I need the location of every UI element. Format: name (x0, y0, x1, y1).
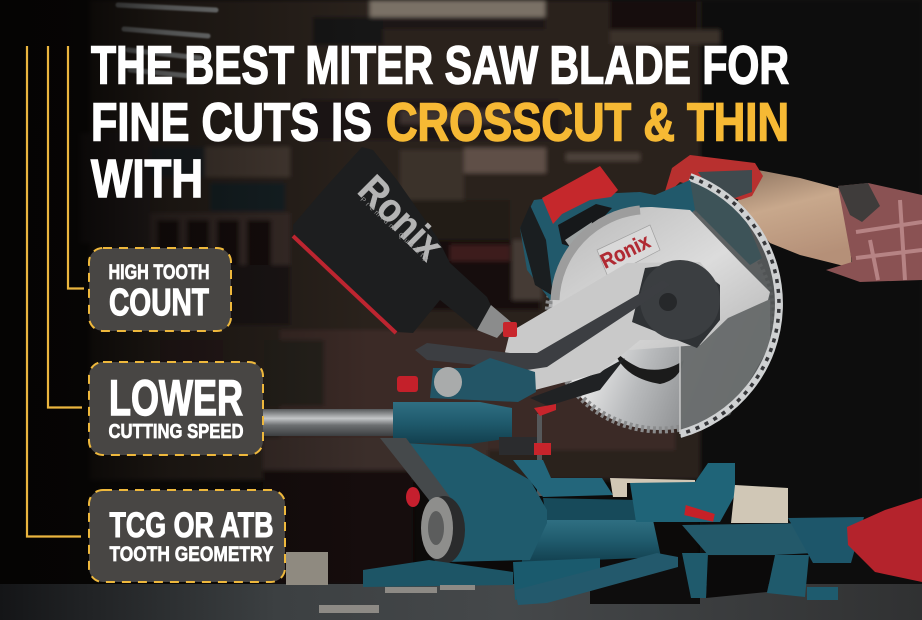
callout: TCG or ATB tooth geometry: TCG OR ATB (110, 506, 274, 545)
lever pivot (659, 293, 677, 311)
callout: high tooth count (89, 248, 231, 331)
blade motor cap (632, 260, 720, 348)
floor (0, 584, 922, 620)
lower turntable (522, 498, 661, 563)
title (91, 36, 789, 209)
red tilt knob (406, 487, 420, 507)
belt (380, 438, 450, 500)
floor chips (319, 585, 475, 613)
main light arm (505, 262, 720, 390)
title: FINE CUTS IS (91, 92, 372, 152)
dust bag: Ronix (350, 167, 451, 269)
support casting (404, 443, 547, 562)
dark lever arm (415, 280, 670, 370)
saw (263, 147, 922, 613)
callout: high tooth count: COUNT (109, 282, 209, 324)
left foot (363, 560, 513, 587)
wood piece back (610, 478, 695, 497)
callout: high tooth count: HIGH TOOTH (108, 261, 210, 284)
cover logo plate: Ronix (597, 230, 654, 273)
wood block right (731, 485, 788, 523)
gray end disc (421, 496, 465, 564)
red gloved hand (847, 498, 922, 582)
dark underbase shadow (590, 560, 700, 604)
red lever (686, 507, 713, 520)
red knob (503, 322, 517, 337)
callout: lower cutting speed: CUTTING SPEED (108, 420, 244, 443)
perforated guard rim (680, 177, 779, 434)
wood block left (286, 552, 328, 585)
connector lines (27, 46, 84, 536)
clamp (499, 404, 556, 496)
callout: lower cutting speed (89, 362, 263, 455)
center base (513, 558, 600, 600)
clear blade guard (680, 177, 779, 434)
red handle (542, 166, 618, 224)
front leg (515, 553, 678, 605)
right fence (630, 463, 735, 522)
upper blade cover (552, 207, 770, 350)
arm and glove (663, 155, 922, 282)
dust bag (293, 147, 511, 338)
dust bag: Premium Quality (359, 196, 430, 263)
rear fence left (513, 460, 613, 497)
callout: lower cutting speed: LOWER (109, 370, 243, 426)
title: WITH (91, 149, 203, 209)
teal cylinder (393, 402, 512, 444)
callout: TCG or ATB tooth geometry: TOOTH GEOMETRY (110, 542, 274, 566)
rail rod (263, 409, 393, 436)
pivot bracket (430, 358, 536, 402)
callout: TCG or ATB tooth geometry (89, 490, 285, 582)
right table (682, 523, 838, 600)
motor housing (520, 180, 695, 300)
title: CROSSCUT & THIN (386, 92, 789, 152)
red top knob (397, 376, 418, 392)
blade (548, 206, 772, 430)
side extension (788, 517, 864, 563)
shadow under arm (530, 358, 625, 406)
